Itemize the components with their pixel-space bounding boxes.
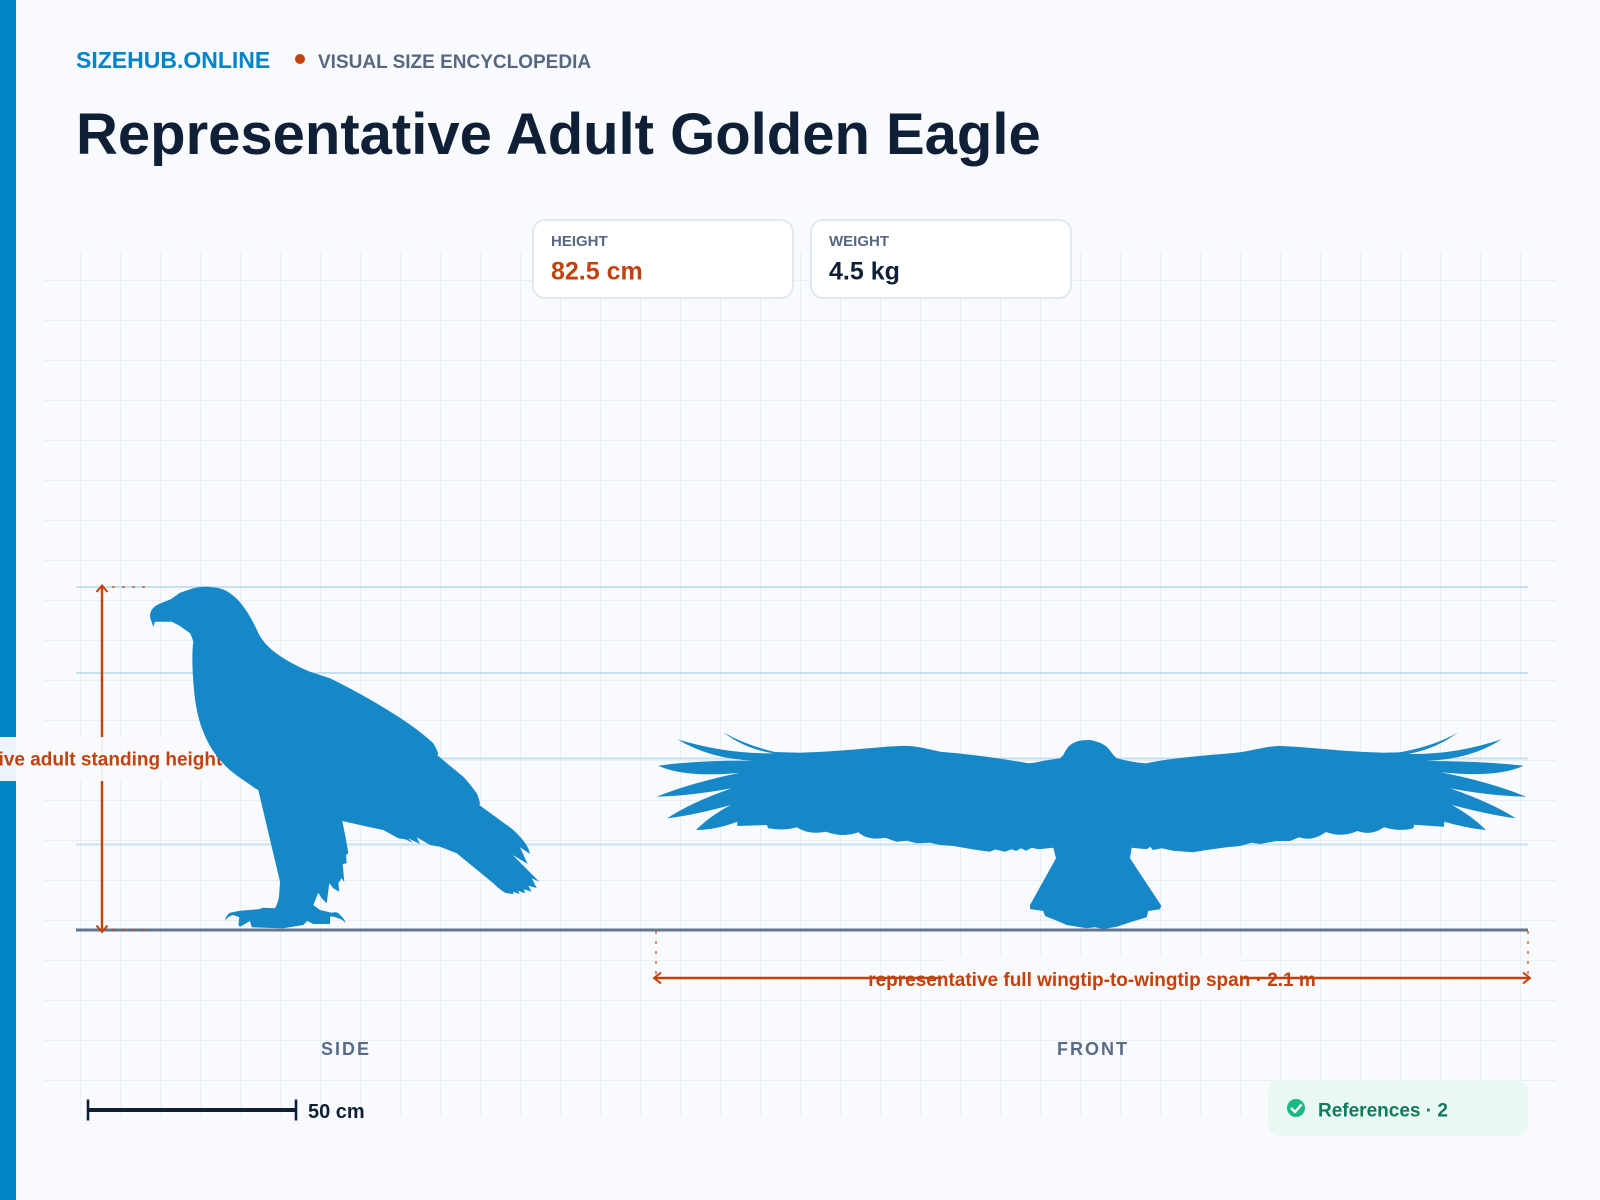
- ruler lines: [76, 587, 1528, 844]
- scale bar: 50 cm: [308, 1101, 365, 1123]
- header: brand line: VISUAL SIZE ENCYCLOPEDIA: [318, 52, 591, 73]
- ground line: [76, 928, 1528, 932]
- card: weight: [811, 220, 1071, 298]
- references badge: References · 2: [1318, 1100, 1448, 1122]
- header: brand line: SIZEHUB.ONLINE: [76, 47, 270, 73]
- icon: check: [1287, 1099, 1305, 1117]
- card: height: [533, 220, 793, 298]
- accent bar: [0, 0, 16, 1200]
- view label: front: FRONT: [1057, 1039, 1129, 1059]
- header: brand line: [76, 47, 591, 73]
- wingspan extension lines: [656, 931, 1528, 976]
- wingspan label: [868, 956, 1316, 1000]
- height label: [0, 737, 309, 781]
- card: weight: WEIGHT: [829, 233, 889, 250]
- height dimension line: [96, 586, 146, 932]
- silhouette: side view eagle: [150, 587, 539, 928]
- scale bar: [88, 1100, 365, 1123]
- title: Representative Adult Golden Eagle: [76, 102, 1041, 167]
- wingspan arrow: [654, 972, 1530, 984]
- card: height: 82.5 cm: [551, 258, 643, 286]
- card: weight: 4.5 kg: [829, 258, 900, 286]
- wingspan label: representative full wingtip-to-wingtip span · 2.1 m: [868, 970, 1316, 991]
- silhouette: front view eagle: [657, 732, 1526, 929]
- card: height: HEIGHT: [551, 233, 608, 250]
- references badge: [1268, 1080, 1528, 1136]
- view label: side: SIDE: [321, 1039, 371, 1059]
